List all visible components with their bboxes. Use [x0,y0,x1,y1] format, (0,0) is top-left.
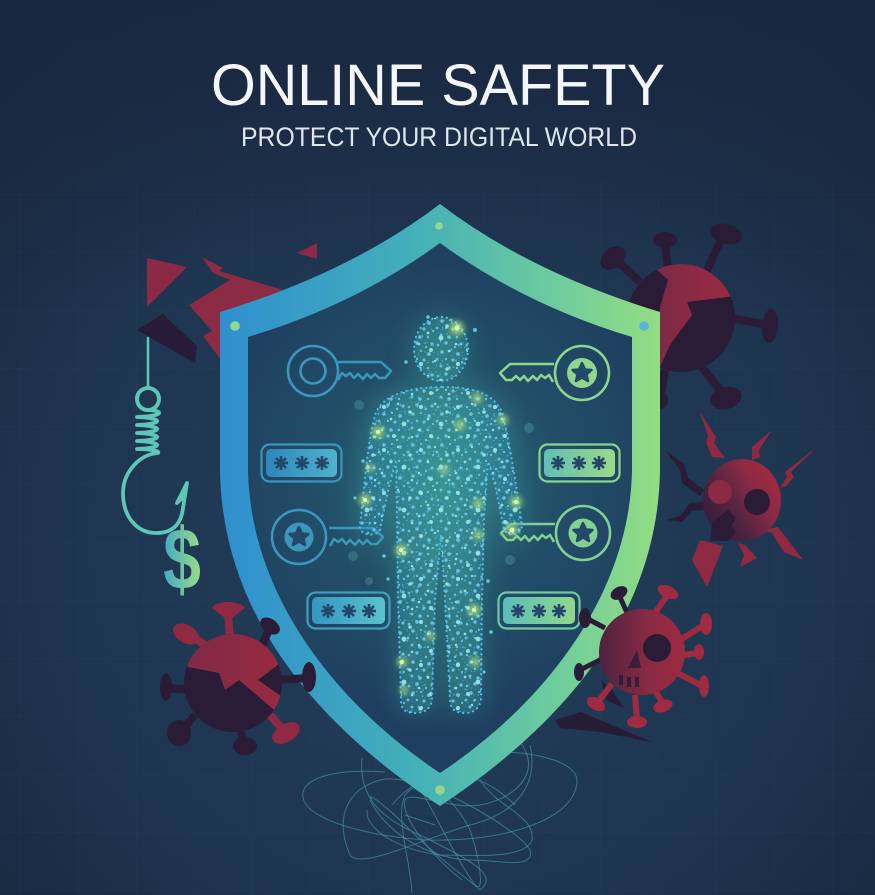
small particle field [360,317,522,713]
key top right [500,346,609,400]
rivets [230,222,649,795]
silhouette base [360,317,522,713]
password field lower right [498,592,580,628]
red triangle [147,258,187,307]
person made of glowing particles [348,315,534,713]
skull head [703,459,781,541]
glow [360,317,522,713]
virus skull: bottom right [574,582,712,728]
virus: bottom left [160,602,316,755]
red jagged shard [189,257,300,370]
key lower right [501,506,610,560]
scribble tangle [303,742,577,893]
background grid [0,180,875,895]
title: ONLINE SAFETY [211,53,665,118]
lightning spikes [692,412,817,587]
edge particles [360,317,522,713]
key top left [288,346,391,396]
virus: top right [596,220,779,413]
subtitle: PROTECT YOUR DIGITAL WORLD [241,122,637,152]
red shard fragments [137,243,317,370]
bright glow dots [359,321,522,694]
shield interior [248,243,632,773]
small red triangle [297,243,317,259]
phishing hook with dollar sign [123,338,201,608]
dark triangle [137,314,197,363]
dark blade shards [555,680,652,742]
password field upper right [540,444,620,482]
hook [123,338,187,533]
larger particle field [360,317,522,713]
top shade [0,0,875,300]
floating particles [353,315,493,674]
password field lower left [308,592,390,628]
virus skull: right [665,412,817,587]
fine particle noise [360,317,522,713]
shield [220,204,660,806]
password field upper left [262,444,342,482]
shield frame [220,204,660,806]
key lower left [272,510,383,564]
dollar sign: $ [163,510,201,608]
